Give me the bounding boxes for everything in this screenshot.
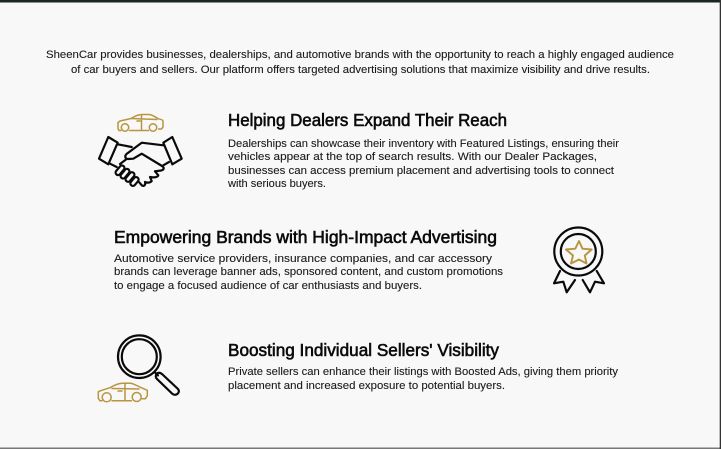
icon: gold car — [98, 383, 147, 402]
icon: gold car — [118, 114, 163, 131]
heading: Empowering Brands: Empowering Brands with High-Impact Advertising — [114, 227, 497, 247]
text block: sellers: placement and increased exposure to potential buyers. — [228, 380, 505, 392]
text block: dealers: Dealerships can showcase their inventory with Featured Listings, ensuring their — [228, 138, 619, 150]
intro text: SheenCar provides businesses, dealerships, and automotive brands with the opportunity to reach a highly engaged audience — [46, 49, 674, 61]
icon: handshake with car — [99, 114, 182, 187]
icon: award ribbon — [554, 228, 604, 292]
text block: dealers: vehicles appear at the top of search results. With our Dealer Packages, — [228, 151, 597, 163]
icon: handshake — [99, 137, 182, 187]
text block: brands — [114, 253, 504, 292]
text block: brands: to engage a focused audience of car enthusiasts and buyers. — [114, 280, 422, 292]
icon: magnifier with car — [98, 335, 179, 402]
icon: gold star — [566, 241, 592, 264]
intro text — [46, 49, 674, 76]
text block: dealers — [227, 138, 619, 190]
intro text: of car buyers and sellers. Our platform offers targeted advertising solutions that maximize visibility and drive results. — [71, 64, 650, 76]
text block: dealers: businesses can access premium placement and advertising tools to connect — [228, 165, 614, 177]
icon: magnifying glass — [118, 335, 179, 395]
text block: sellers: Private sellers can enhance their listings with Boosted Ads, giving them priority — [228, 366, 619, 378]
text block: sellers — [228, 366, 619, 392]
text block: brands: brands can leverage banner ads, sponsored content, and custom promotions — [114, 266, 504, 278]
heading: Boosting Sellers: Boosting Individual Sellers' Visibility — [228, 340, 499, 360]
text block: brands: Automotive service providers, insurance companies, and car accessory — [114, 253, 493, 265]
text block: dealers: with serious buyers. — [227, 178, 326, 190]
heading: Helping Dealers: Helping Dealers Expand Their Reach — [228, 110, 507, 130]
